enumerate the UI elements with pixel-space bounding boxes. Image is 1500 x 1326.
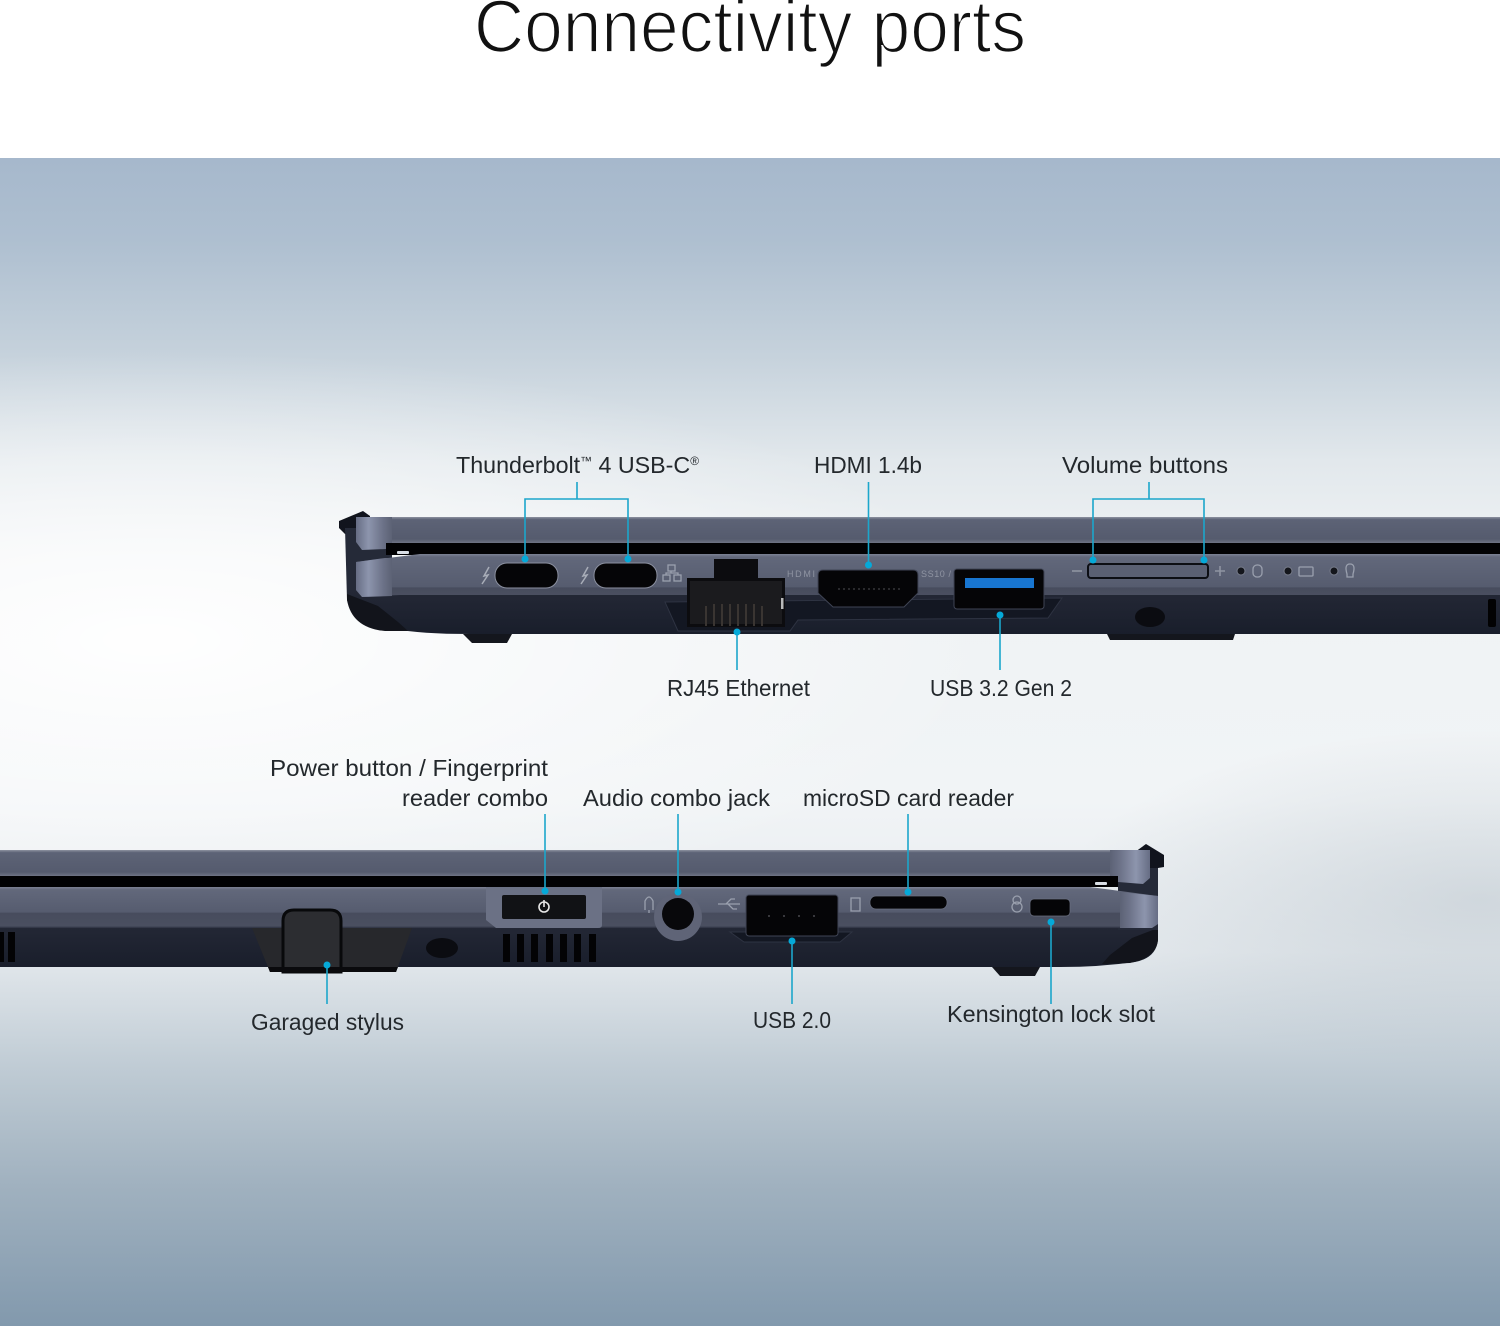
label: volume: Volume buttons [1062, 452, 1228, 478]
status LEDs [1237, 564, 1354, 577]
USB 3.2 port [954, 569, 1044, 609]
black gap [386, 543, 1500, 555]
left vents [0, 932, 15, 962]
USB 2.0 recess [730, 932, 852, 942]
Kensington lock slot [1030, 899, 1070, 916]
connector: audio [674, 814, 682, 896]
label: Thunderbolt: ® [690, 454, 699, 468]
hinge lower [1120, 892, 1158, 928]
HDMI label on chassis: HDMI [787, 569, 815, 579]
connector: RJ45 [734, 628, 740, 670]
rubber foot [992, 967, 1040, 976]
HDMI port [818, 570, 918, 607]
label: RJ45: RJ45 Ethernet [667, 675, 810, 701]
icon: SD card [851, 898, 860, 911]
vents [503, 934, 596, 962]
label: power button: reader combo [402, 785, 548, 811]
hinge notch [1135, 844, 1164, 868]
connector: HDMI [865, 482, 872, 568]
connector: power [542, 814, 548, 894]
Thunderbolt port 1 [482, 563, 558, 588]
label: audio: Audio combo jack [583, 785, 770, 811]
volume buttons [1072, 564, 1225, 578]
speaker slot [1488, 599, 1496, 627]
label: microSD: microSD card reader [803, 785, 1014, 811]
front rubber corner [347, 594, 408, 631]
connector: USB 2.0 [788, 938, 796, 1004]
hinge lower [356, 558, 392, 597]
icon: lock [1012, 896, 1022, 912]
rubber feet [463, 634, 512, 643]
chassis back [345, 528, 392, 600]
black gap [0, 876, 1118, 887]
lower body [347, 590, 1500, 634]
lid [0, 850, 1120, 876]
connector: Thunderbolt [522, 482, 632, 562]
label: Kensington: Kensington lock slot [947, 1001, 1155, 1027]
label: Thunderbolt: Thunderbolt [456, 452, 581, 478]
label: stylus: Garaged stylus [251, 1009, 404, 1035]
garaged stylus [252, 910, 412, 972]
Thunderbolt port 2 [581, 563, 657, 588]
RJ45 Ethernet port [687, 559, 785, 627]
icon: headset mic [645, 897, 653, 913]
hinge upper [356, 517, 392, 550]
laptop: left side view [339, 511, 1500, 643]
icon: USB [718, 899, 740, 909]
connector: microSD [904, 814, 912, 896]
chassis back [1118, 860, 1158, 930]
connector: USB 3.2 [996, 612, 1004, 670]
microSD slot [870, 896, 947, 909]
port recess [665, 598, 1062, 631]
microphone hole [426, 938, 458, 958]
hinge notch [339, 511, 370, 534]
label: HDMI: HDMI 1.4b [814, 452, 922, 478]
SS icon: SS10 / [921, 569, 951, 579]
connector: volume [1090, 482, 1208, 564]
label: power button [270, 755, 548, 811]
lid [385, 517, 1500, 543]
laptop: right side view [0, 844, 1164, 976]
base upper [356, 554, 1500, 597]
label: Thunderbolt: 4 USB-C [592, 452, 690, 478]
base upper [0, 887, 1158, 928]
hinge upper [1110, 850, 1150, 884]
label: power button: Power button / Fingerprint [270, 755, 548, 781]
rear rubber corner [1102, 928, 1158, 964]
power button / fingerprint reader [486, 887, 602, 928]
label: Thunderbolt: ™ [580, 454, 592, 468]
audio combo jack [654, 893, 702, 941]
microphone hole [1135, 607, 1165, 627]
connector: stylus [324, 962, 330, 1004]
lower body [0, 924, 1158, 967]
icon: network [663, 565, 681, 581]
label: USB 3.2: USB 3.2 Gen 2 [930, 675, 1072, 701]
label: USB 2.0: USB 2.0 [753, 1007, 831, 1033]
USB 2.0 port [746, 895, 838, 936]
connector: Kensington [1048, 918, 1054, 1004]
